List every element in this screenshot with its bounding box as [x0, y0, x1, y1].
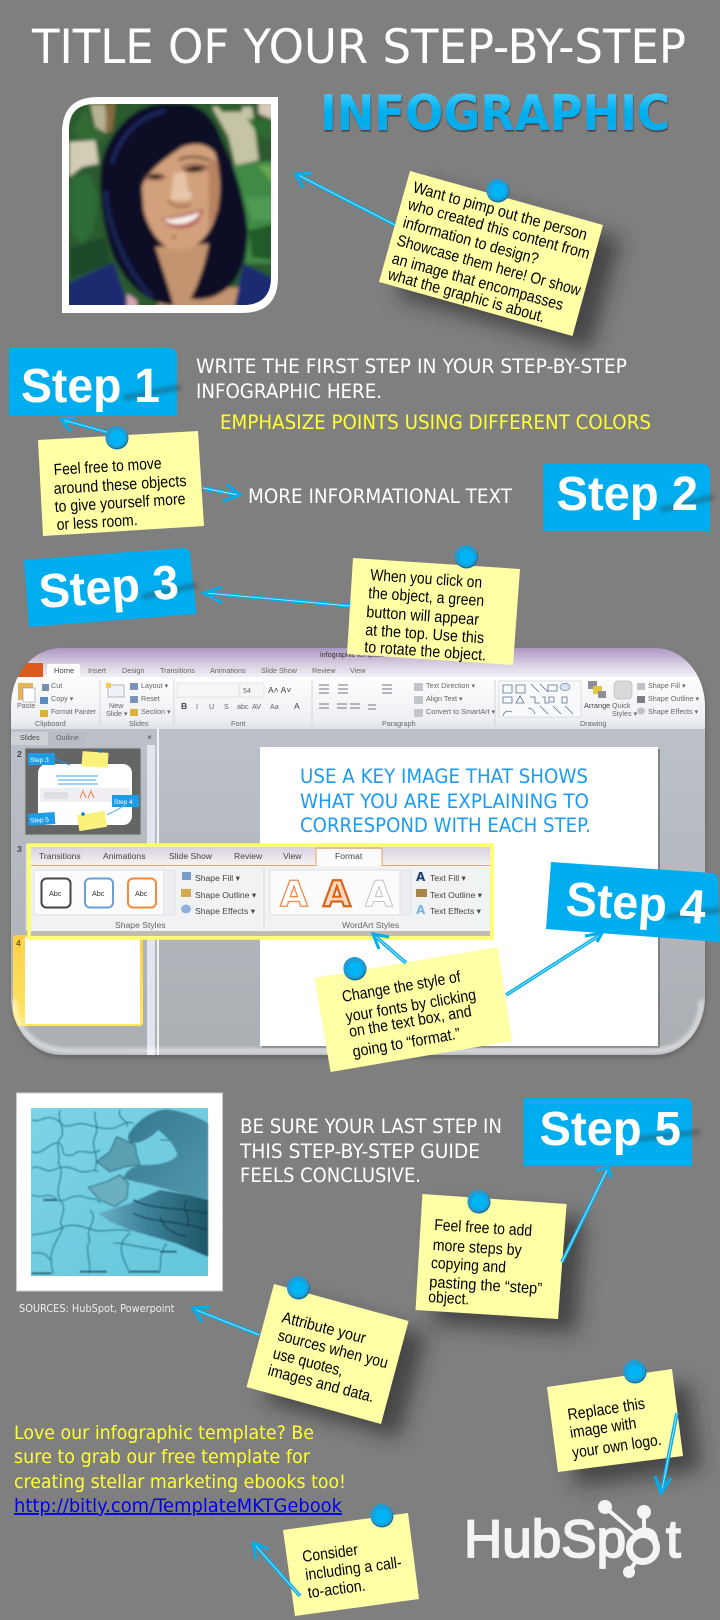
ribbon: Shape Effects ▾ — [648, 707, 699, 716]
shape styles group: Abc — [49, 889, 62, 898]
title bar and tabs: Design — [122, 666, 144, 675]
note text: Want to pimp out the person — [411, 179, 589, 244]
shape styles group: Shape Outline ▾ — [195, 890, 257, 900]
ribbon: Clipboard — [35, 719, 66, 728]
call to action text: Love our infographic template? Be — [14, 1422, 314, 1444]
ribbon: Slide ▾ — [106, 709, 128, 718]
hubspot logo: t — [666, 1510, 681, 1569]
step 5 badge — [524, 1098, 700, 1166]
note text: to give yourself more — [54, 491, 186, 516]
ribbon: Aa — [270, 702, 279, 711]
format tabs: Animations — [103, 851, 146, 861]
note text: the object, a green — [368, 585, 485, 610]
pin — [344, 957, 366, 980]
ribbon: Copy ▾ — [51, 694, 74, 703]
logo sprocket — [598, 1500, 656, 1578]
sticky note: move objects — [38, 426, 204, 536]
format tabs: View — [283, 851, 302, 861]
slides pane: Slides — [20, 733, 40, 742]
ribbon: Convert to SmartArt ▾ — [426, 707, 496, 716]
pin — [455, 545, 478, 568]
ribbon: Cut — [51, 681, 62, 690]
ribbon: Drawing — [580, 719, 606, 728]
wordart styles group: Text Fill ▾ — [430, 873, 467, 883]
ribbon: Format Painter — [51, 707, 97, 716]
note text: including a call- — [304, 1554, 403, 1584]
step 1 badge — [9, 348, 181, 416]
arrow: note to format ribbon — [373, 934, 406, 963]
title bar and tabs: Home — [54, 666, 74, 675]
title bar and tabs: Insert — [88, 666, 106, 675]
note text — [364, 567, 487, 665]
format tabs: Format — [335, 851, 363, 861]
wordart styles group: WordArt Styles — [342, 920, 399, 930]
format tabs: Slide Show — [169, 851, 213, 861]
step 5 text: FEELS CONCLUSIVE. — [240, 1164, 421, 1187]
sticky note: pimp out the person — [379, 171, 621, 350]
note text: Change the style of — [341, 969, 462, 1006]
sticky note: attribute sources — [246, 1276, 427, 1438]
ribbon: U — [209, 702, 214, 711]
wordart styles group: A — [365, 874, 393, 915]
ribbon: I — [196, 702, 198, 711]
note text: or less room. — [56, 512, 138, 534]
slide heading: WHAT YOU ARE EXPLAINING TO — [300, 790, 589, 813]
slide 2 thumbnail — [25, 748, 141, 835]
arrow: note to logo — [655, 1413, 677, 1493]
heading: infographic: INFOGRAPHIC — [320, 85, 670, 142]
arrow: note to step 4 — [506, 933, 602, 995]
ribbon: abc — [237, 702, 249, 711]
note text: Showcase them here! Or show — [395, 232, 583, 300]
hubspot logo — [464, 1500, 681, 1578]
sticky note: add more steps — [416, 1190, 585, 1333]
ribbon: A˄ A˅ — [268, 685, 291, 695]
wordart styles group: A — [416, 870, 426, 884]
arrow: note to call to action — [253, 1543, 300, 1596]
step 2 badge: Step 2 — [556, 468, 698, 521]
slide heading: USE A KEY IMAGE THAT SHOWS — [300, 765, 588, 788]
step 1 text: INFOGRAPHIC HERE. — [196, 380, 382, 403]
format ribbon callout — [29, 845, 492, 938]
ribbon: New — [109, 701, 124, 710]
call to action text: http://bitly.com/TemplateMKTGebook — [14, 1495, 342, 1517]
step 5 text: THIS STEP-BY-STEP GUIDE — [239, 1140, 480, 1163]
title bar and tabs: Slide Show — [261, 666, 298, 675]
wordart styles group: A — [323, 874, 351, 915]
pin — [486, 179, 510, 202]
emphasis text: EMPHASIZE POINTS USING DIFFERENT COLORS — [220, 411, 651, 434]
note text: around these objects — [53, 473, 187, 498]
ribbon — [11, 677, 705, 729]
note text: what the graphic is about. — [385, 266, 547, 326]
note text: button will appear — [366, 604, 480, 629]
note text: Feel free to move — [53, 455, 162, 479]
ribbon: Section ▾ — [141, 707, 171, 716]
wordart styles group: A — [416, 903, 426, 917]
slide 2 thumbnail: Step 3 — [30, 757, 49, 764]
step 1 text: WRITE THE FIRST STEP IN YOUR STEP-BY-STEP — [196, 355, 627, 378]
shape styles group: Abc — [135, 889, 148, 898]
shape styles group: Abc — [92, 889, 105, 898]
note text: on the text box, and — [348, 1003, 473, 1041]
title bar and tabs — [5, 648, 705, 678]
call to action text: sure to grab our free template for — [14, 1446, 310, 1468]
sticky note: call to action — [283, 1504, 419, 1616]
ribbon: Reset — [141, 694, 160, 703]
call to action text — [14, 1422, 346, 1517]
pin — [468, 1190, 490, 1214]
note text — [53, 455, 187, 534]
pin — [106, 426, 128, 450]
ribbon: Styles ▾ — [612, 709, 638, 718]
ribbon: AV — [252, 702, 261, 711]
ribbon: Shape Outline ▾ — [648, 694, 700, 703]
note text: information to design? — [401, 214, 540, 268]
body background — [159, 729, 705, 1055]
note text: Attribute your — [280, 1309, 368, 1348]
note text: images and data. — [266, 1362, 376, 1406]
step 2 badge — [544, 464, 714, 531]
ribbon: Layout ▾ — [141, 681, 169, 690]
note text — [301, 1542, 403, 1602]
ribbon: A — [294, 701, 300, 711]
ribbon: Align Text ▾ — [426, 694, 463, 703]
hubspot logo: o — [630, 1510, 659, 1569]
slide 2 thumbnail: Step 5 — [30, 816, 50, 825]
step 1 text — [196, 355, 627, 403]
note text: When you click on — [370, 567, 483, 592]
note text: more steps by — [432, 1237, 522, 1259]
informational text: MORE INFORMATIONAL TEXT — [248, 485, 512, 508]
ribbon: Font — [231, 719, 245, 728]
step 3 badge — [24, 548, 197, 627]
sticky note: click on the object — [347, 545, 520, 665]
slide 4 thumbnail: 4 — [16, 938, 21, 948]
note text: your fonts by clicking — [344, 987, 477, 1026]
portrait photo in white frame — [62, 97, 278, 313]
wordart styles group: A — [280, 874, 308, 915]
powerpoint screenshot panel — [5, 648, 706, 1058]
note text — [385, 179, 592, 326]
ribbon: B — [181, 701, 187, 711]
note text — [341, 969, 477, 1061]
note text — [266, 1309, 390, 1406]
note text: at the top. Use this — [365, 622, 485, 647]
note text: image with — [569, 1415, 638, 1442]
shape styles group: Shape Styles — [115, 920, 166, 930]
sticky note: change font style — [314, 947, 512, 1072]
slides pane — [11, 729, 159, 1055]
note text: going to “format.” — [351, 1026, 462, 1061]
note text: an image that encompasses — [390, 250, 565, 314]
shape styles group — [34, 870, 257, 930]
title: TITLE OF YOUR STEP-BY-STEP — [31, 20, 686, 75]
title bar and tabs: Review — [312, 666, 336, 675]
ribbon: Paragraph — [382, 719, 416, 728]
wordart styles group: Text Outline ▾ — [430, 890, 483, 900]
note text — [428, 1217, 543, 1308]
arrow: note to step 5 — [562, 1167, 611, 1262]
title bar and tabs: View — [350, 666, 366, 675]
call to action text: creating stellar marketing ebooks too! — [14, 1471, 346, 1493]
title bar and tabs: Transitions — [160, 666, 195, 675]
slide 4 thumbnail — [13, 935, 143, 1026]
note text: pasting the “step” — [429, 1274, 543, 1298]
ribbon: S — [224, 702, 229, 711]
pin — [287, 1276, 310, 1300]
step 5 badge: Step 5 — [540, 1103, 681, 1156]
puzzle picture — [31, 1108, 208, 1276]
note text: object. — [428, 1289, 470, 1308]
ribbon: Shape Fill ▾ — [648, 681, 686, 690]
arrow: note to step 3 — [204, 587, 350, 606]
main slide — [260, 747, 660, 1048]
step 4 badge — [546, 862, 720, 942]
step 1 badge: Step 1 — [21, 360, 160, 413]
title bar and tabs: Animations — [210, 666, 246, 675]
slide 2 thumbnail: Step 4 — [114, 799, 133, 806]
note text: your own logo. — [571, 1432, 663, 1462]
step 3 badge: Step 3 — [37, 556, 180, 619]
wordart styles group — [270, 870, 483, 930]
slides pane: 2 — [17, 749, 22, 759]
note text: who created this content from — [405, 196, 592, 263]
sources text: SOURCES: HubSpot, Powerpoint — [19, 1302, 175, 1315]
pin — [370, 1504, 394, 1528]
note text: copying and — [430, 1255, 506, 1277]
puzzle image frame — [16, 1093, 222, 1291]
ribbon: Quick — [612, 701, 631, 710]
format tabs: Transitions — [39, 851, 81, 861]
arrow: note to sources — [193, 1307, 259, 1335]
note text: sources when you — [276, 1327, 390, 1372]
arrow: note to informational text — [203, 484, 240, 501]
slide heading — [300, 768, 590, 832]
note text: Feel free to add — [434, 1217, 533, 1240]
sticky note: replace logo — [547, 1360, 701, 1486]
step 5 text — [239, 1115, 502, 1187]
arrow: note to photo — [296, 173, 395, 225]
format tabs — [31, 847, 490, 866]
slide 3 thumbnail — [25, 843, 141, 931]
bottom rim highlight — [14, 1000, 702, 1051]
slides pane: Outline — [56, 733, 79, 742]
note text: to rotate the object. — [364, 639, 487, 665]
title bar and tabs: infographic template - Microsoft PowerPoint — [320, 650, 459, 659]
ribbon: 54 — [243, 686, 251, 695]
step 4 badge: Step 4 — [564, 873, 708, 935]
arrow: note to step 1 — [61, 418, 110, 433]
ribbon: Arrange — [584, 701, 610, 710]
ribbon: Slides — [129, 719, 149, 728]
wordart styles group: Text Effects ▾ — [430, 906, 482, 916]
note text: use quotes, — [271, 1345, 345, 1380]
ribbon: Paste — [17, 701, 35, 710]
slides pane: × — [147, 732, 152, 742]
note text: Consider — [301, 1542, 360, 1566]
shape styles group: Shape Fill ▾ — [195, 873, 241, 883]
step 5 text: BE SURE YOUR LAST STEP IN — [240, 1115, 502, 1138]
jigsaw lines — [32, 1110, 173, 1273]
hubspot logo: HubSp — [464, 1510, 626, 1569]
note text: to-action. — [307, 1578, 367, 1602]
format tabs: Review — [234, 851, 263, 861]
shape styles group: Shape Effects ▾ — [195, 906, 256, 916]
slides pane: 3 — [17, 844, 22, 854]
ribbon: Text Direction ▾ — [426, 681, 476, 690]
note text: Replace this — [566, 1396, 646, 1424]
slide heading: CORRESPOND WITH EACH STEP. — [300, 814, 591, 837]
pin — [624, 1360, 646, 1384]
note text — [566, 1396, 663, 1462]
